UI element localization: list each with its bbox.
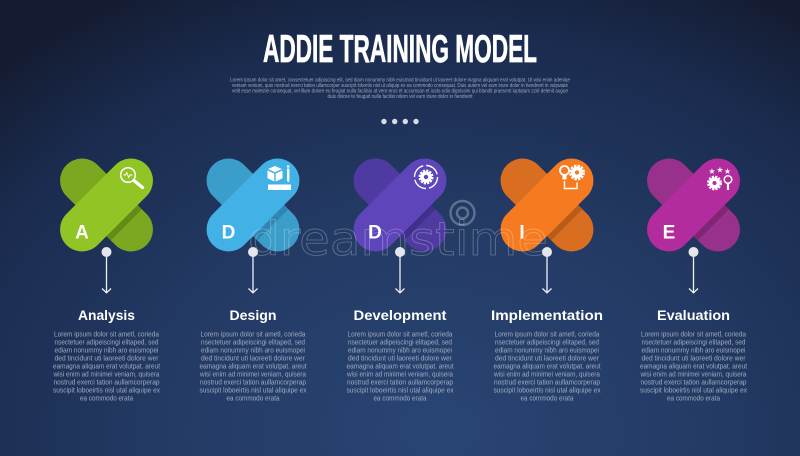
text block: implementation: suscipit loboeirtis nisl utal aliquipe ex — [494, 388, 601, 394]
text block: development: nostrud exerci tation aullamcorperap — [347, 380, 453, 386]
letter E: E — [663, 222, 675, 244]
text block: implementation: ded tincidunt uti laoreeti dolore wer — [495, 356, 600, 362]
text block: development — [346, 332, 454, 402]
icon: stars, gear and magnifier: ★ — [708, 167, 716, 176]
text block: implementation: wisi enim ad minimei veniam, quisera — [493, 372, 600, 378]
connector: design — [248, 247, 258, 293]
connector: implementation — [542, 247, 552, 293]
letter A: A — [75, 222, 89, 244]
text block: development: Lorem ipsum dolor sit ametl, corieda — [348, 332, 453, 338]
text block: implementation: Lorem ipsum dolor sit ametl, corieda — [494, 332, 600, 338]
text block: design: ediam nonummy nibh aro euismopei — [201, 348, 305, 354]
text block: development: wisi enim ad minimei veniam, quisera — [346, 372, 453, 378]
cross: evaluation — [613, 125, 774, 285]
text block: design: ded tincidunt uti laoreeti dolore wer — [201, 356, 306, 362]
text block: implementation: ea commodo erata — [520, 396, 574, 402]
text block: implementation: eamagna aliquam erat volutpat. areut — [494, 364, 601, 370]
text block: design: Lorem ipsum dolor sit ametl, corieda — [200, 332, 306, 338]
text block: implementation: nostrud exerci tation aullamcorperap — [494, 380, 600, 386]
text block: analysis: nostrud exerci tation aullamcorperap — [54, 380, 160, 386]
intro text block: Lorem ipsum dolor sit amet, consectetuer adipiscing elit, sed diam nonummy nibh euismod tincidunt ut laoreet dolore magna aliquam erat volutpat. Ut wisi enim adeniqe — [230, 78, 570, 84]
text block: development: eamagna aliquam erat volutpat. areut — [346, 364, 454, 370]
text block: development: nsectetuer adipeiscingi elitaped, sed — [348, 340, 452, 346]
letter I: I — [519, 222, 525, 244]
text block: design: wisi enim ad minimei veniam, quisera — [199, 372, 306, 378]
text block: analysis: ea commodo erata — [80, 396, 133, 402]
text block: evaluation: Lorem ipsum dolor sit ametl, corieda — [641, 332, 746, 338]
connector: analysis — [102, 247, 112, 293]
text block: evaluation: ded tincidunt uti laoreeti dolore wer — [642, 356, 746, 362]
heading: analysis: Analysis — [78, 307, 135, 323]
text block: development: suscipit loboeirtis nisl utal aliquipe ex — [346, 388, 454, 394]
cross: analysis — [26, 125, 187, 285]
intro text block: duis dolore te feugait nulla facilisi odem vel eum iriure dolor in hendrerit — [328, 94, 473, 100]
text block: design — [199, 332, 307, 402]
icon: cube, pencil and ruler — [268, 166, 291, 190]
icon: stars, gear and magnifier: ★ — [724, 167, 731, 176]
intro text block — [230, 78, 570, 100]
connector: development — [395, 247, 405, 293]
text block: evaluation: eamagna aliquam erat volutpat. areut — [640, 364, 747, 370]
icon: stars, gear and magnifier — [708, 166, 732, 190]
heading: evaluation: Evaluation — [657, 307, 730, 323]
icon: bulb, gear and connector — [560, 166, 584, 188]
intro text block: velit esse molestie consequat, vel illum dolore eu feugiat nulla facilisis at vero eros et accumsan et iusto odio dignissim qui blandit praesent luptatum zzril delenit augue — [232, 88, 568, 94]
text block: analysis: ded tincidunt uti laoreeti dolore wer — [54, 356, 159, 362]
text block: design: nostrud exerci tation aullamcorperap — [200, 380, 306, 386]
text block: development: ea commodo erata — [374, 396, 427, 402]
text block: implementation — [493, 332, 601, 402]
cross: design — [173, 125, 333, 285]
text block: analysis: wisi enim ad minimei veniam, quisera — [53, 372, 160, 378]
text block: analysis: eamagna aliquam erat volutpat. areut — [53, 364, 160, 370]
text block: analysis: suscipit loboeirtis nisl utal aliquipe ex — [53, 388, 160, 394]
text block: evaluation: suscipit loboeirtis nisl utal aliquipe ex — [640, 388, 747, 394]
icon: stars, gear and magnifier: ★ — [716, 166, 724, 174]
icon: magnifier with pulse — [121, 168, 142, 188]
letter D: D — [368, 222, 382, 244]
text block: analysis: nsectetuer adipeiscingi elitaped, sed — [54, 340, 159, 346]
text block: evaluation: nostrud exerci tation aullamcorperap — [640, 380, 747, 386]
connector: evaluation — [688, 247, 698, 293]
text block: evaluation — [640, 332, 747, 402]
text block: evaluation: nsectetuer adipeiscingi elitaped, sed — [642, 340, 746, 346]
text block: analysis: Lorem ipsum dolor sit ametl, corieda — [54, 332, 159, 338]
heading: development: Development — [354, 307, 447, 323]
letter D: D — [222, 222, 235, 244]
cross: implementation — [467, 125, 627, 285]
text block: analysis — [53, 332, 160, 402]
text block: development: ediam nonummy nibh aro euismopei — [348, 348, 452, 354]
pagination dots — [381, 119, 419, 124]
text block: analysis: ediam nonummy nibh aro euismopei — [54, 348, 159, 354]
text block: evaluation: ediam nonummy nibh aro euismopei — [642, 348, 746, 354]
heading: design: Design — [230, 307, 276, 323]
title: ADDIE TRAINING MODEL — [263, 28, 537, 71]
text block: design: ea commodo erata — [226, 396, 280, 402]
text block: evaluation: ea commodo erata — [667, 396, 720, 402]
text block: development: ded tincidunt uti laoreeti dolore wer — [348, 356, 453, 362]
text block: design: nsectetuer adipeiscingi elitaped, sed — [201, 340, 305, 346]
text block: design: suscipit loboeirtis nisl utal aliquipe ex — [200, 388, 307, 394]
intro text block: veniam venium, quis nostrud exerci tation ullamcorper suscipit lobortis nisl ut aliquip ex ea commodo consequat. Duis autem vel eum iriure dolor in hendrerit in vulputate — [232, 83, 568, 89]
text block: implementation: nsectetuer adipeiscingi elitaped, sed — [495, 340, 599, 346]
cross: development — [320, 125, 480, 285]
icon: gear with circular arrows — [414, 166, 438, 188]
text block: implementation: ediam nonummy nibh aro euismopei — [495, 348, 599, 354]
heading: implementation: Implementation — [491, 307, 603, 323]
watermark: dreamstime — [248, 212, 548, 266]
text block: design: eamagna aliquam erat volutpat. areut — [200, 364, 307, 370]
text block: evaluation: wisi enim ad minimei veniam, quisera — [640, 372, 747, 378]
